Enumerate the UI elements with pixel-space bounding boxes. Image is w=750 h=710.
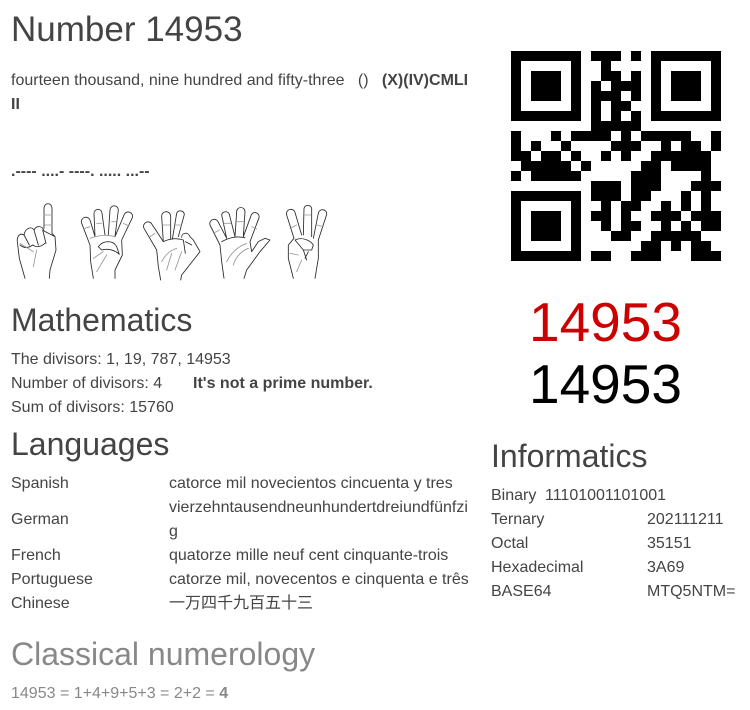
german value: g (169, 523, 178, 540)
number of divisors: Number of divisors: 4 (11, 375, 162, 392)
ternary (491, 511, 724, 528)
german value: vierzehntausendneunhundertdreiundfünfzi (169, 499, 468, 516)
binary: 11101001101001 (545, 487, 666, 504)
number in black: 14953 (529, 353, 682, 415)
number in red: 14953 (529, 291, 682, 353)
ternary: 202111211 (647, 511, 724, 528)
spanish value: catorce mil novecientos cincuenta y tres (169, 475, 453, 492)
portuguese label: Portuguese (11, 571, 93, 588)
divisors: The divisors: 1, 19, 787, 14953 (11, 351, 231, 368)
icon: sign language hands (16, 203, 328, 280)
hexadecimal: Hexadecimal (491, 559, 583, 576)
heading: languages: Languages (11, 426, 169, 462)
base64 (491, 583, 735, 600)
number in words and roman numeral (11, 72, 468, 113)
base64: MTQ5NTM= (647, 583, 735, 600)
numerology sum: 14953 = 1+4+9+5+3 = 2+2 = 4 (11, 685, 228, 702)
number in words and roman numeral: fourteen thousand, nine hundred and fifty-three () (X)(IV)CMLI (11, 72, 468, 89)
octal: 35151 (647, 535, 692, 552)
binary: Binary (491, 487, 536, 504)
french value: quatorze mille neuf cent cinquante-trois (169, 547, 448, 564)
hexadecimal (491, 559, 684, 576)
octal: Octal (491, 535, 528, 552)
chinese label: Chinese (11, 595, 70, 612)
sum of divisors: Sum of divisors: 15760 (11, 399, 174, 416)
german label: German (11, 511, 69, 528)
hexadecimal: 3A69 (647, 559, 684, 576)
prime status: It's not a prime number. (193, 375, 373, 392)
octal (491, 535, 692, 552)
german value (169, 499, 468, 540)
languages table (11, 475, 469, 612)
chinese value: 一万四千九百五十三 (169, 595, 313, 612)
ternary: Ternary (491, 511, 544, 528)
heading: classical numerology: Classical numerology (11, 636, 315, 672)
base64: BASE64 (491, 583, 551, 600)
qr code (511, 51, 721, 261)
morse code: .---- ....- ----. ..... ...-- (11, 163, 150, 180)
spanish label: Spanish (11, 475, 69, 492)
title: Number 14953 (11, 10, 243, 49)
french label: French (11, 547, 61, 564)
portuguese value: catorze mil, novecentos e cinquenta e três (169, 571, 469, 588)
number in words and roman numeral: II (11, 96, 20, 113)
binary (491, 487, 666, 504)
heading: mathematics: Mathematics (11, 302, 192, 338)
heading: informatics: Informatics (491, 438, 647, 474)
